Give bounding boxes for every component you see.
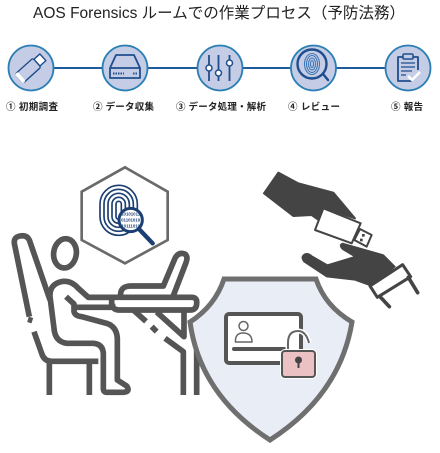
step 3: data processing and analysis	[176, 46, 266, 113]
icon: sliders	[198, 46, 242, 90]
label: ① 初期調査	[6, 101, 58, 113]
table	[88, 297, 197, 310]
cuff	[370, 265, 411, 297]
icon: magnifier: 10101011	[121, 211, 141, 216]
process connector line	[31, 67, 408, 69]
chair	[14, 236, 50, 317]
shield	[190, 279, 352, 440]
body	[50, 281, 128, 392]
hands passing usb stick	[264, 173, 418, 307]
icon: magnifier: 10111010	[121, 223, 141, 228]
label: ④ レビュー	[288, 101, 340, 113]
upper hand	[264, 173, 355, 223]
icon: magnifier	[119, 208, 153, 243]
label: ③ データ処理・解析	[176, 101, 266, 113]
icon: magnifier: 01101010	[121, 217, 141, 222]
icon: clipboard check	[386, 46, 430, 90]
icon: fingerprint	[100, 185, 137, 235]
padlock	[282, 331, 315, 377]
step 5: report	[386, 46, 430, 113]
title: AOS Forensics ルームでの作業プロセス（予防法務）	[33, 4, 405, 22]
id card	[226, 314, 301, 363]
step 1: initial investigation	[6, 46, 58, 113]
icon: hard drive	[102, 46, 148, 90]
icon: usb stick	[8, 46, 54, 90]
step 4: review	[288, 46, 340, 113]
label: ② データ収集	[93, 101, 154, 113]
hexagon fingerprint badge	[82, 167, 168, 263]
person working at laptop	[14, 236, 197, 395]
lower hand	[302, 243, 395, 286]
laptop	[121, 253, 187, 297]
label: ⑤ 報告	[391, 101, 423, 113]
icon: fingerprint magnifier	[291, 46, 336, 90]
usb stick	[315, 208, 372, 247]
step 2: data collection	[93, 46, 154, 113]
head	[52, 237, 78, 269]
